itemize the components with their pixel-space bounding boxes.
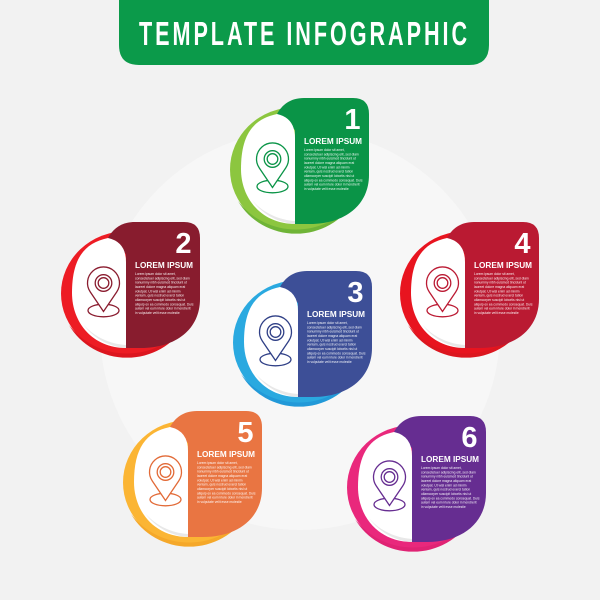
text block: autem vel eum iriure dolor in hendrerit <box>135 307 191 311</box>
text block: veniam, quis nostrud exerci tation <box>197 483 246 487</box>
panel: step 4 <box>400 222 539 358</box>
heading: LOREM IPSUM <box>307 310 365 319</box>
text block: volutpat. Ut wisi enim ad minim <box>474 289 520 293</box>
text block: consectetuer adipiscing elit, sed diam <box>307 325 362 329</box>
text block: aliquip ex ea commodo consequat. Duis <box>197 491 256 495</box>
text block: veniam, quis nostrud exerci tation <box>135 294 184 298</box>
text block: volutpat. Ut wisi enim ad minim <box>307 338 353 342</box>
number: 1 <box>344 104 361 136</box>
heading: LOREM IPSUM <box>474 261 532 270</box>
text block <box>307 321 366 364</box>
text block: Lorem ipsum dolor sit amet, <box>135 272 176 276</box>
text block: ullamcorper suscipit lobortis nisl ut <box>135 298 185 302</box>
icon: location pin <box>374 461 405 511</box>
text block: volutpat. Ut wisi enim ad minim <box>304 165 350 169</box>
text block: veniam, quis nostrud exerci tation <box>304 170 353 174</box>
text block: nonummy nibh euismod tincidunt ut <box>197 470 249 474</box>
number: 6 <box>461 422 478 454</box>
text block <box>304 148 363 191</box>
text block: ullamcorper suscipit lobortis nisl ut <box>474 298 524 302</box>
text block: laoreet dolore magna aliquam erat <box>197 474 247 478</box>
text block: volutpat. Ut wisi enim ad minim <box>421 483 467 487</box>
icon: location pin <box>256 143 288 193</box>
text block <box>474 272 533 315</box>
text block: laoreet dolore magna aliquam erat <box>474 285 524 289</box>
text block: nonummy nibh euismod tincidunt ut <box>474 281 526 285</box>
text block: veniam, quis nostrud exerci tation <box>474 294 523 298</box>
text block: nonummy nibh euismod tincidunt ut <box>135 281 187 285</box>
text block: consectetuer adipiscing elit, sed diam <box>135 276 190 280</box>
text block: ullamcorper suscipit lobortis nisl ut <box>421 492 471 496</box>
number: 3 <box>347 277 364 309</box>
text block: Lorem ipsum dolor sit amet, <box>307 321 348 325</box>
text block: in vulputate velit esse molestie <box>197 500 242 504</box>
text block: consectetuer adipiscing elit, sed diam <box>197 465 252 469</box>
text block: ullamcorper suscipit lobortis nisl ut <box>304 174 354 178</box>
text block: in vulputate velit esse molestie <box>474 311 519 315</box>
text block: nonummy nibh euismod tincidunt ut <box>307 330 359 334</box>
text block: Lorem ipsum dolor sit amet, <box>421 466 462 470</box>
text block: nonummy nibh euismod tincidunt ut <box>304 157 356 161</box>
text block: in vulputate velit esse molestie <box>307 360 352 364</box>
text block: consectetuer adipiscing elit, sed diam <box>474 276 529 280</box>
panel: step 3 <box>233 271 372 407</box>
text block: laoreet dolore magna aliquam erat <box>307 334 357 338</box>
number: 2 <box>175 228 192 260</box>
text block: autem vel eum iriure dolor in hendrerit <box>304 183 360 187</box>
text block: autem vel eum iriure dolor in hendrerit <box>197 496 253 500</box>
text block: aliquip ex ea commodo consequat. Duis <box>421 496 480 500</box>
text block: laoreet dolore magna aliquam erat <box>421 479 471 483</box>
text block: veniam, quis nostrud exerci tation <box>307 343 356 347</box>
text block <box>135 272 194 315</box>
title banner <box>119 0 489 65</box>
text block: consectetuer adipiscing elit, sed diam <box>421 470 476 474</box>
text block <box>197 461 256 504</box>
text block: Lorem ipsum dolor sit amet, <box>474 272 515 276</box>
text block: ullamcorper suscipit lobortis nisl ut <box>197 487 247 491</box>
icon: location pin <box>260 316 291 366</box>
heading: LOREM IPSUM <box>421 455 479 464</box>
heading: LOREM IPSUM <box>197 450 255 459</box>
text block: autem vel eum iriure dolor in hendrerit <box>421 501 477 505</box>
text block: veniam, quis nostrud exerci tation <box>421 488 470 492</box>
icon: location pin <box>426 267 458 317</box>
text block: aliquip ex ea commodo consequat. Duis <box>474 302 533 306</box>
panel: step 5 <box>123 411 262 547</box>
panel: step 1 <box>230 98 369 234</box>
heading: LOREM IPSUM <box>304 137 362 146</box>
number: 4 <box>514 228 531 260</box>
text block: laoreet dolore magna aliquam erat <box>135 285 185 289</box>
text block: in vulputate velit esse molestie <box>135 311 180 315</box>
text block: autem vel eum iriure dolor in hendrerit <box>307 356 363 360</box>
text block: aliquip ex ea commodo consequat. Duis <box>307 351 366 355</box>
text block: volutpat. Ut wisi enim ad minim <box>197 478 243 482</box>
text block: Lorem ipsum dolor sit amet, <box>197 461 238 465</box>
text block: ullamcorper suscipit lobortis nisl ut <box>307 347 357 351</box>
text block: in vulputate velit esse molestie <box>421 505 466 509</box>
text block: nonummy nibh euismod tincidunt ut <box>421 475 473 479</box>
text block: autem vel eum iriure dolor in hendrerit <box>474 307 530 311</box>
panel: step 2 <box>61 222 200 358</box>
text block: volutpat. Ut wisi enim ad minim <box>135 289 181 293</box>
heading: LOREM IPSUM <box>135 261 193 270</box>
text block: aliquip ex ea commodo consequat. Duis <box>304 178 363 182</box>
panel: step 6 <box>347 416 486 552</box>
icon: location pin <box>88 267 119 317</box>
text block: aliquip ex ea commodo consequat. Duis <box>135 302 194 306</box>
text block: laoreet dolore magna aliquam erat <box>304 161 354 165</box>
icon: location pin <box>150 456 181 506</box>
text block: consectetuer adipiscing elit, sed diam <box>304 152 359 156</box>
text block <box>421 466 480 509</box>
number: 5 <box>237 417 254 449</box>
text block: Lorem ipsum dolor sit amet, <box>304 148 345 152</box>
text block: in vulputate velit esse molestie <box>304 187 349 191</box>
